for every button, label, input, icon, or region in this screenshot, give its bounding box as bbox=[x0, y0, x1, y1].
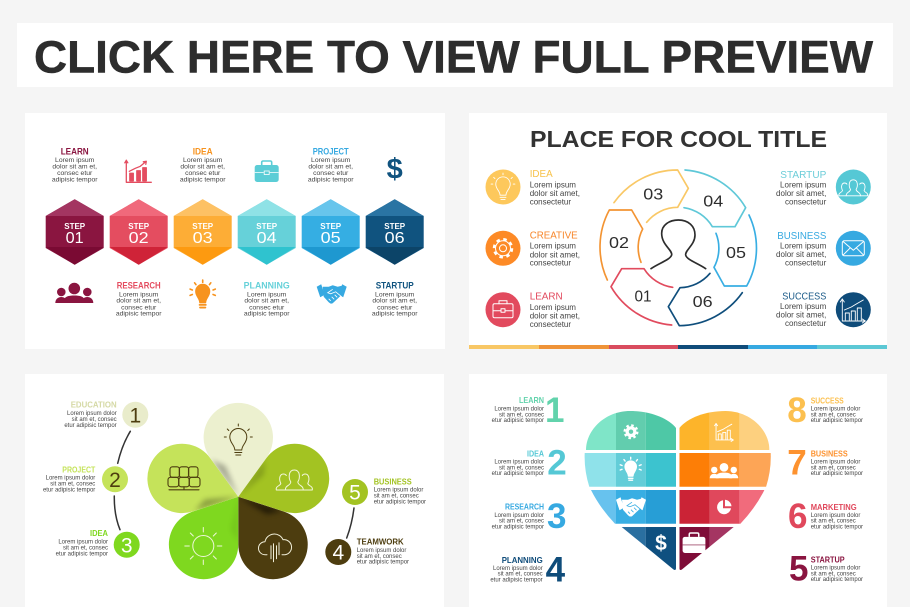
segment 04 bbox=[684, 170, 746, 227]
item 3: research: sit am et, consec bbox=[499, 519, 544, 525]
item 2: idea: sit am et, consec bbox=[499, 465, 544, 471]
cycle ring bbox=[600, 170, 756, 326]
item 5: startup bbox=[789, 550, 863, 589]
item 5: startup: Lorem ipsum dolor bbox=[811, 566, 860, 572]
text: project: Lorem ipsum bbox=[311, 157, 351, 164]
item: success: Lorem ipsum bbox=[780, 302, 827, 311]
item 1: learn: 1 bbox=[545, 391, 564, 430]
item 2: project bbox=[43, 464, 128, 493]
text: project bbox=[308, 146, 354, 183]
segment 03 bbox=[614, 170, 688, 222]
text: startup: dolor sit am et, bbox=[372, 298, 417, 305]
item 3: research bbox=[492, 497, 566, 536]
item: startup bbox=[776, 169, 871, 206]
item: creative: Lorem ipsum bbox=[530, 242, 576, 251]
item: learn: consectetur bbox=[530, 320, 571, 329]
text: idea: dolor sit am et, bbox=[180, 163, 225, 170]
item 4: teamwork bbox=[325, 537, 409, 566]
text: planning bbox=[244, 281, 290, 318]
item: idea: Lorem ipsum bbox=[530, 180, 576, 189]
text: project: dolor sit am et, bbox=[308, 163, 353, 170]
icon: bulb bbox=[620, 457, 641, 480]
item 8: success bbox=[787, 391, 863, 430]
item 4: teamwork: 4 bbox=[332, 542, 344, 565]
segment numbers: 01 bbox=[634, 288, 652, 305]
text: planning: dolor sit am et, bbox=[244, 298, 289, 305]
item 8: success: 8 bbox=[787, 391, 807, 430]
step 01 hexagon: 01 bbox=[66, 230, 84, 247]
item: creative: CREATIVE bbox=[530, 229, 578, 241]
step 06 hexagon: 06 bbox=[385, 230, 405, 247]
segment numbers: 02 bbox=[609, 235, 629, 252]
colour bar bbox=[469, 345, 887, 349]
item 4: planning: sit am et, consec bbox=[498, 572, 543, 578]
text: learn: LEARN bbox=[61, 146, 89, 156]
item: startup: STARTUP bbox=[780, 169, 826, 181]
petal: right bbox=[238, 444, 330, 514]
item: startup: Lorem ipsum bbox=[780, 180, 827, 189]
segment numbers bbox=[609, 186, 746, 311]
icon: team outline bbox=[276, 470, 312, 490]
item 6: marketing bbox=[788, 497, 863, 536]
text: learn bbox=[52, 146, 98, 183]
item 2: project: 2 bbox=[109, 469, 121, 492]
text: startup: STARTUP bbox=[376, 281, 414, 291]
item: success: consectetur bbox=[785, 319, 827, 328]
text: research: Lorem ipsum bbox=[119, 291, 159, 298]
item 4: planning bbox=[490, 550, 566, 589]
heart left half bbox=[584, 411, 676, 570]
text: idea: Lorem ipsum bbox=[183, 157, 223, 164]
item 1: education: etur adipisic tempor bbox=[64, 423, 117, 429]
item 1: education: sit am et, consec bbox=[72, 417, 117, 423]
item 7: business: 7 bbox=[787, 444, 807, 483]
text: idea: consec etur bbox=[185, 170, 221, 177]
item: business: BUSINESS bbox=[777, 230, 826, 242]
text: planning: consec etur bbox=[249, 304, 285, 311]
item 7: business: etur adipisic tempor bbox=[811, 471, 863, 477]
item 5: business: Lorem ipsum dolor bbox=[374, 487, 423, 493]
text: idea bbox=[180, 146, 226, 183]
icon: light bulb outline bbox=[224, 424, 252, 455]
item 7: business: sit am et, consec bbox=[811, 465, 856, 471]
item 4: teamwork: sit am et, consec bbox=[357, 554, 402, 560]
segment numbers: 05 bbox=[726, 245, 746, 262]
item 3: idea: 3 bbox=[121, 534, 133, 557]
person silhouette bbox=[651, 220, 706, 269]
item 4: planning: etur adipisic tempor bbox=[490, 577, 543, 583]
step 02 hexagon: STEP bbox=[128, 222, 150, 231]
text: research: RESEARCH bbox=[117, 281, 161, 291]
icon: briefcase bbox=[683, 533, 705, 553]
item: startup: consectetur bbox=[785, 197, 827, 206]
item 2: idea: IDEA bbox=[527, 449, 544, 458]
step 05 hexagon: 05 bbox=[321, 230, 341, 247]
step 04 hexagon: 04 bbox=[257, 230, 277, 247]
item: business: consectetur bbox=[785, 258, 827, 267]
item 4: teamwork: TEAMWORK bbox=[357, 537, 404, 547]
flower petals bbox=[147, 402, 330, 580]
icon: light bulb bbox=[190, 280, 215, 308]
item 8: success: Lorem ipsum dolor bbox=[811, 407, 860, 413]
item: idea: dolor sit amet, bbox=[530, 189, 580, 198]
petal: bottom left bbox=[168, 496, 238, 580]
step 02 hexagon bbox=[110, 199, 168, 265]
item: creative: consectetur bbox=[530, 259, 571, 268]
text: startup: consec etur bbox=[377, 304, 413, 311]
text: project: consec etur bbox=[313, 170, 349, 177]
item 5: startup: STARTUP bbox=[811, 555, 845, 564]
item 6: marketing: Lorem ipsum dolor bbox=[811, 513, 860, 519]
icon: solar panel bbox=[168, 467, 200, 490]
icon: sun bbox=[185, 528, 222, 564]
item: success: dolor sit amet, bbox=[776, 311, 826, 320]
text: startup bbox=[372, 281, 418, 318]
item: idea bbox=[486, 168, 580, 206]
item: success bbox=[776, 291, 871, 328]
item 1: learn: sit am et, consec bbox=[499, 412, 544, 418]
text: research: consec etur bbox=[121, 304, 157, 311]
item 7: business: BUSINESS bbox=[811, 450, 848, 459]
item 4: teamwork: etur adipisic tempor bbox=[357, 560, 409, 566]
icon: bar chart bbox=[125, 160, 151, 182]
segment numbers: 04 bbox=[703, 194, 724, 210]
item: idea: IDEA bbox=[530, 168, 553, 180]
item 3: idea: etur adipisic tempor bbox=[56, 551, 108, 557]
heart right half bbox=[679, 411, 771, 570]
item 1: learn: Lorem ipsum dolor bbox=[494, 407, 544, 413]
item 1: learn: etur adipisic tempor bbox=[492, 418, 544, 424]
item 6: marketing: MARKETING bbox=[811, 503, 857, 512]
segment numbers: 06 bbox=[693, 294, 713, 311]
item 6: marketing: 6 bbox=[788, 497, 807, 536]
text: learn: dolor sit am et, bbox=[52, 163, 97, 170]
step 06 hexagon: STEP bbox=[384, 222, 406, 231]
item 1: learn: LEARN bbox=[519, 396, 544, 405]
step 06 hexagon bbox=[366, 199, 424, 265]
icon: handshake bbox=[616, 497, 646, 517]
step 05 hexagon bbox=[302, 199, 360, 265]
item 2: idea: 2 bbox=[547, 444, 567, 483]
item 8: success: sit am et, consec bbox=[811, 412, 856, 418]
item 4: planning: Lorem ipsum dolor bbox=[493, 566, 543, 572]
step 03 hexagon: 03 bbox=[193, 230, 213, 247]
item: success: SUCCESS bbox=[782, 291, 826, 303]
step 02 hexagon: 02 bbox=[129, 230, 149, 247]
item 5: business bbox=[342, 477, 426, 505]
item 3: idea: sit am et, consec bbox=[63, 545, 108, 551]
icon: dollar sign: $ bbox=[387, 154, 403, 186]
item 2: idea bbox=[492, 444, 567, 483]
item 3: idea bbox=[56, 528, 140, 558]
item: startup: dolor sit amet, bbox=[776, 189, 826, 198]
icon: dollar: $ bbox=[655, 532, 667, 555]
banner: click here: CLICK HERE TO VIEW FULL PREVIEW bbox=[34, 32, 873, 82]
item 8: success: etur adipisic tempor bbox=[811, 418, 863, 424]
item: learn: dolor sit amet, bbox=[530, 312, 580, 321]
segment 05 bbox=[714, 215, 756, 286]
item 5: business: 5 bbox=[349, 482, 361, 505]
icon: rain cloud bbox=[258, 534, 292, 562]
item: business bbox=[776, 230, 871, 267]
text: startup: Lorem ipsum bbox=[375, 291, 415, 298]
item 1: education bbox=[64, 400, 148, 429]
item 4: teamwork: Lorem ipsum dolor bbox=[357, 548, 406, 554]
step 04 hexagon bbox=[238, 199, 296, 265]
petal: top bbox=[204, 403, 273, 497]
item: learn: Lorem ipsum bbox=[530, 303, 576, 312]
panel: heart diagram bbox=[469, 374, 887, 607]
item 2: idea: etur adipisic tempor bbox=[492, 471, 544, 477]
item 3: research: Lorem ipsum dolor bbox=[494, 513, 544, 519]
item 1: education: EDUCATION bbox=[71, 400, 117, 410]
step 05 hexagon: STEP bbox=[320, 222, 342, 231]
panel: flower diagram bbox=[25, 374, 444, 607]
icon: gear bbox=[625, 426, 637, 438]
text: research: dolor sit am et, bbox=[116, 298, 161, 305]
segment 02 bbox=[600, 210, 643, 280]
item 5: startup: etur adipisic tempor bbox=[811, 577, 863, 583]
icon: chart bbox=[715, 423, 733, 441]
item 2: project: sit am et, consec bbox=[50, 482, 95, 488]
item 5: startup: sit am et, consec bbox=[811, 571, 856, 577]
item 2: project: etur adipisic tempor bbox=[43, 487, 95, 493]
text: research bbox=[116, 281, 162, 318]
text: idea: IDEA bbox=[193, 146, 213, 156]
heading: place for cool title: PLACE FOR COOL TITLE bbox=[530, 126, 827, 152]
item 8: success: SUCCESS bbox=[811, 397, 844, 406]
text: learn: consec etur bbox=[57, 170, 93, 177]
item 1: learn bbox=[492, 391, 564, 430]
item 6: marketing: sit am et, consec bbox=[811, 519, 856, 525]
item 3: idea: Lorem ipsum dolor bbox=[58, 539, 108, 545]
segment 01 bbox=[611, 269, 673, 325]
item 7: business bbox=[787, 444, 863, 483]
item: creative bbox=[486, 229, 580, 268]
item: creative: dolor sit amet, bbox=[530, 250, 580, 259]
icon: team bbox=[55, 283, 93, 303]
text: learn: adipisic tempor bbox=[52, 176, 98, 183]
item: business: Lorem ipsum bbox=[780, 241, 827, 250]
item 5: business: etur adipisic tempor bbox=[374, 499, 426, 505]
icon: handshake bbox=[317, 284, 347, 304]
text: project: adipisic tempor bbox=[308, 176, 354, 183]
item 3: research: etur adipisic tempor bbox=[492, 524, 544, 530]
text: idea: adipisic tempor bbox=[180, 176, 226, 183]
text: learn: Lorem ipsum bbox=[55, 157, 95, 164]
item 5: business: BUSINESS bbox=[374, 477, 412, 487]
step 04 hexagon: STEP bbox=[256, 222, 278, 231]
connector arcs bbox=[114, 431, 354, 538]
item 5: business: sit am et, consec bbox=[374, 493, 419, 499]
icon: team bbox=[710, 463, 738, 478]
item 2: project: PROJECT bbox=[62, 464, 96, 474]
icon: briefcase bbox=[255, 161, 279, 182]
text: startup: adipisic tempor bbox=[372, 311, 418, 318]
item 1: education: Lorem ipsum dolor bbox=[67, 411, 117, 417]
text: planning: PLANNING bbox=[244, 281, 290, 291]
item: learn: LEARN bbox=[530, 291, 563, 303]
step 03 hexagon bbox=[174, 199, 232, 265]
item 3: research: RESEARCH bbox=[505, 503, 544, 512]
item: idea: consectetur bbox=[530, 197, 571, 206]
item: business: dolor sit amet, bbox=[776, 250, 826, 259]
icon: pie chart bbox=[717, 500, 732, 514]
panel: cycle diagram bbox=[469, 113, 887, 349]
item 3: idea: IDEA bbox=[90, 528, 108, 538]
item 4: planning: 4 bbox=[546, 550, 566, 589]
item 7: business: Lorem ipsum dolor bbox=[811, 460, 860, 466]
step 01 hexagon bbox=[46, 199, 104, 265]
item: learn bbox=[486, 291, 580, 329]
text: planning: adipisic tempor bbox=[244, 311, 290, 318]
item 2: project: Lorem ipsum dolor bbox=[46, 476, 95, 482]
segment numbers: 03 bbox=[643, 186, 663, 204]
panel: hexagon steps bbox=[25, 113, 445, 349]
item 4: planning: PLANNING bbox=[502, 556, 543, 565]
step 03 hexagon: STEP bbox=[192, 222, 214, 231]
item 5: startup: 5 bbox=[789, 550, 808, 589]
text: research: adipisic tempor bbox=[116, 311, 162, 318]
segment 06 bbox=[668, 273, 742, 326]
text: planning: Lorem ipsum bbox=[247, 291, 287, 298]
item 1: education: 1 bbox=[129, 404, 141, 427]
text: project: PROJECT bbox=[313, 146, 349, 156]
item 6: marketing: etur adipisic tempor bbox=[811, 524, 863, 530]
petal: left bbox=[147, 444, 238, 514]
item 3: research: 3 bbox=[547, 497, 566, 536]
item 2: idea: Lorem ipsum dolor bbox=[494, 460, 544, 466]
step 01 hexagon: STEP bbox=[64, 222, 86, 231]
petal: bottom right bbox=[238, 496, 308, 580]
